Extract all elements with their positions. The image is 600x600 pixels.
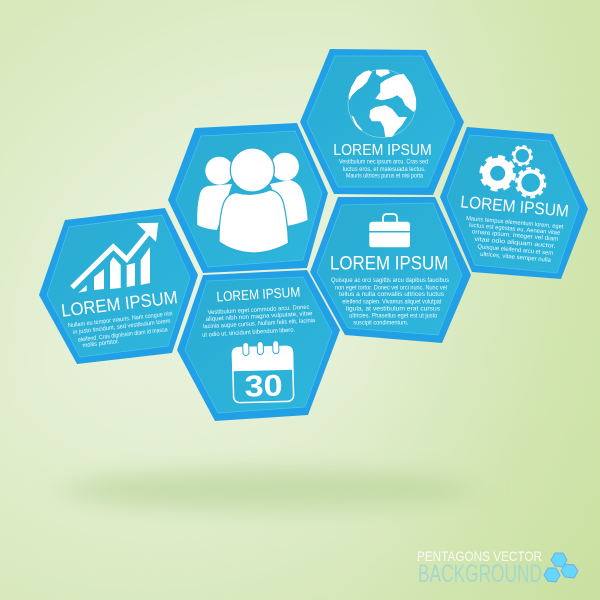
icon: three small hexagons — [544, 553, 578, 582]
heading: LOREM IPSUM — [460, 192, 570, 221]
text block: mollis porttitor. — [82, 338, 120, 349]
text block: in justo tincidunt, sed vestibulum lorem — [73, 318, 171, 336]
text block: Quisque eleifend arcu et sem — [477, 243, 553, 257]
text block — [339, 158, 428, 180]
heading: LOREM IPSUM — [330, 254, 448, 274]
icon: briefcase — [369, 214, 410, 247]
text block: aliquet nibh non magna vulputate, vitae — [205, 310, 313, 323]
icon: group of people — [197, 148, 308, 253]
text block: lacinia augue cursus. Nullam felis elit, lacinia — [203, 317, 316, 330]
text block: luctus eros, et malesuada lectus. — [343, 166, 426, 173]
text block: ornare ipsum. Integer vel diam — [472, 228, 559, 243]
text block — [466, 215, 564, 264]
logo: pentagons vector background: PENTAGONS VECTOR — [417, 548, 542, 564]
panel: people hexagon — [168, 123, 328, 273]
heading: LOREM IPSUM — [60, 287, 179, 321]
text block: Vestibulum nec ipsum arcu. Cras sed — [339, 158, 428, 165]
icon: gears — [481, 146, 545, 197]
floor shadow — [65, 469, 475, 511]
icon: calendar 30: 30 — [244, 369, 283, 403]
text block: eleifend sapien. Vivamus aliquet volutpat — [342, 298, 442, 305]
panel: calendar hexagon — [177, 270, 340, 421]
text block: non eget tortor. Donec vel orci nunc. Nunc vel — [335, 284, 447, 291]
text block: eleifend. Cras dignissim diam id massa — [78, 326, 168, 344]
text block: suscipit condimentum. — [353, 319, 409, 326]
text block: vitae odio aliquam auctor. — [474, 236, 556, 250]
logo: pentagons vector background: BACKGROUND — [418, 560, 542, 588]
logo: pentagons vector background — [417, 548, 578, 588]
heading: LOREM IPSUM — [333, 142, 432, 159]
panel: gears hexagon — [440, 127, 588, 279]
text block: ultrices, vitae semper nulla — [480, 251, 552, 264]
text block: ultricies. Phasellus eget est ut justo — [349, 313, 438, 320]
text block: Vestibulum eget commodo arcu. Donec — [207, 304, 310, 316]
text block: Mauris tempus elementum lorem, eget — [466, 215, 564, 231]
text block — [68, 310, 173, 349]
text block: Quisque ac orci sagittis arcu dapibus faucibus — [331, 277, 449, 284]
text block: ut odio ut, tincidunt bibendum libero. — [202, 327, 296, 339]
text block: ligula, at vestibulum erat cursus — [346, 306, 440, 313]
panel: chart hexagon — [39, 208, 198, 364]
icon: calendar 30 — [231, 340, 294, 404]
text block: Nullam eu tempor mauris. Nam congue nisi — [68, 310, 173, 329]
panel: briefcase hexagon — [310, 197, 471, 343]
text block: Mauris ultrices purus et nisi porta — [346, 173, 424, 180]
heading: LOREM IPSUM — [216, 284, 301, 304]
text block: luctus est egestas eu. Aenean vitae — [469, 222, 561, 237]
text block: tellus a nulla convallis ultrices luctus — [339, 291, 444, 298]
icon: rising bar chart with arrow — [72, 223, 158, 293]
text block — [331, 277, 449, 326]
icon: globe — [348, 70, 416, 138]
text block — [202, 304, 316, 339]
panel: globe hexagon — [300, 49, 464, 195]
